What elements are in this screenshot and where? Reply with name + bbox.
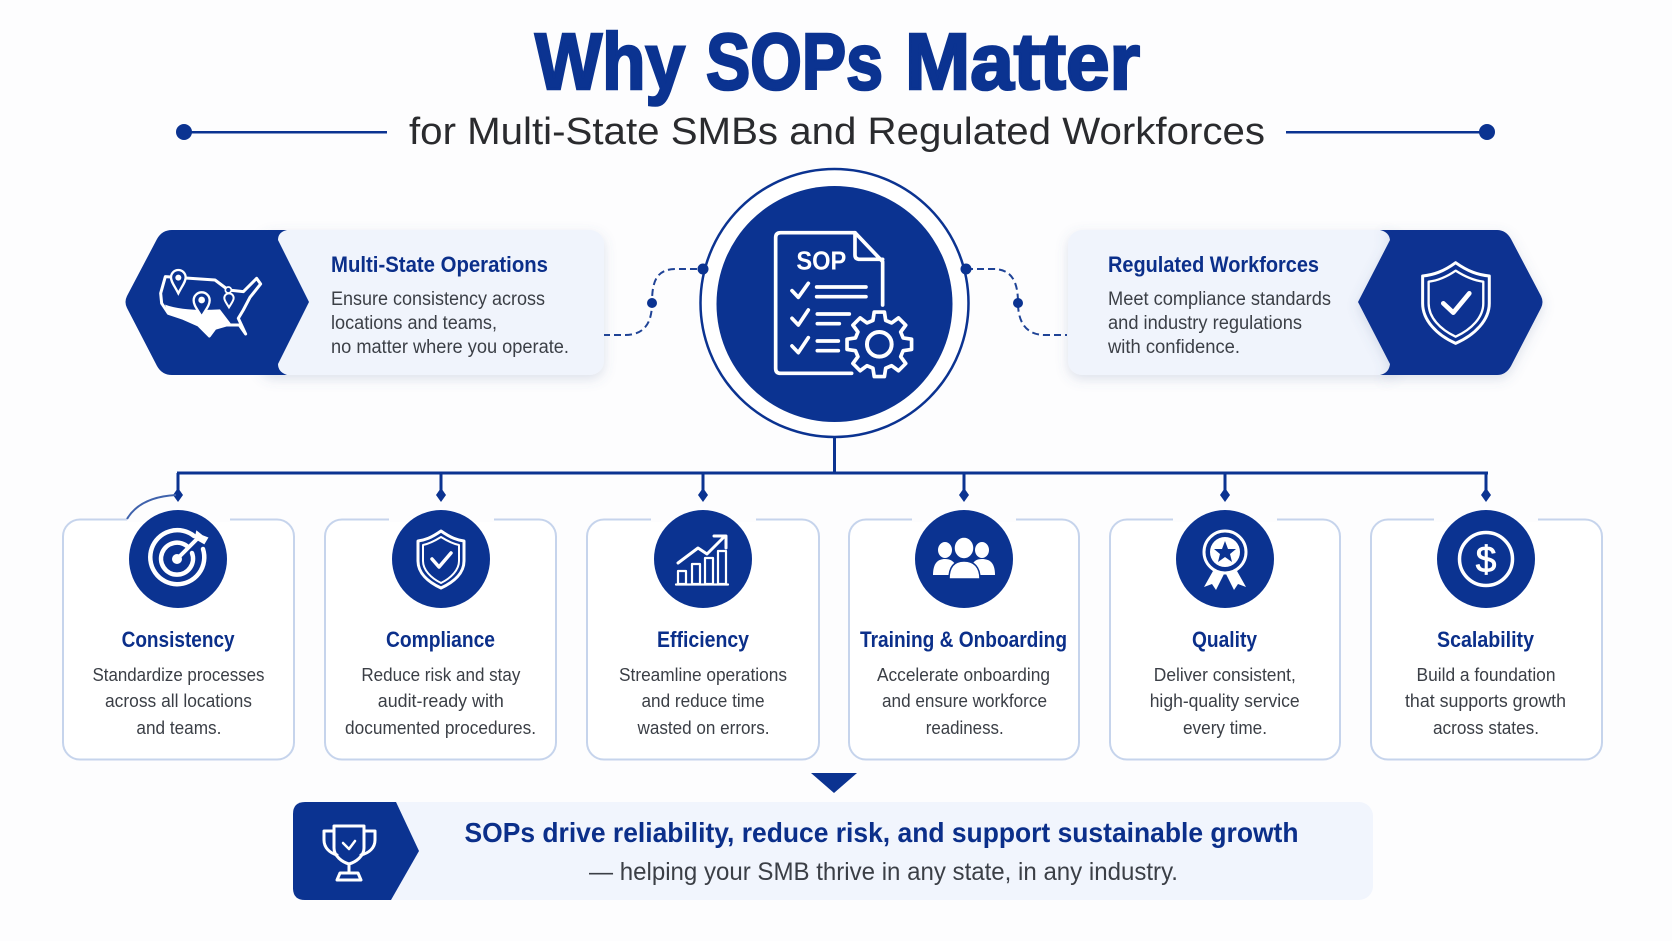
text block: Ensure consistency across — [331, 289, 545, 310]
icon: dollar coin: $ — [1476, 539, 1496, 580]
subtitle right rule — [1286, 124, 1495, 140]
icon: SOP document with gear: SOP — [796, 247, 846, 275]
heading: Efficiency — [657, 627, 750, 652]
text block: and reduce time — [642, 690, 764, 711]
text block: Meet compliance standards — [1108, 289, 1331, 310]
icon: SOP document with gear — [776, 233, 912, 377]
panel: regulated workforces — [1068, 230, 1542, 375]
text block: readiness. — [926, 717, 1004, 738]
text block: and teams. — [136, 717, 221, 738]
text block — [619, 664, 787, 738]
left connector — [603, 269, 703, 335]
text block: wasted on errors. — [637, 717, 770, 738]
text block: locations and teams, — [331, 313, 497, 334]
card: scalability — [1371, 510, 1602, 760]
text block: Streamline operations — [619, 664, 787, 685]
text block: Build a foundation — [1416, 664, 1556, 685]
text block: audit-ready with — [378, 690, 504, 711]
icon: US map with pins — [161, 270, 261, 336]
icon: rising bar chart — [676, 536, 728, 584]
text block: high-quality service — [1150, 690, 1300, 711]
panel: multi-state operations — [126, 230, 604, 375]
card: quality — [1110, 510, 1340, 760]
text block: Accelerate onboarding — [877, 664, 1050, 685]
heading: Regulated Workforces — [1108, 252, 1319, 277]
card: compliance — [325, 510, 556, 760]
right connector — [966, 269, 1067, 335]
card: training and onboarding — [849, 510, 1079, 760]
text block: Standardize processes — [92, 664, 264, 685]
text block: documented procedures. — [345, 717, 536, 738]
text block: every time. — [1183, 717, 1267, 738]
text block — [92, 664, 264, 738]
closing text: — helping your SMB thrive in any state, in any industry. — [589, 858, 1178, 886]
text block — [1107, 289, 1331, 358]
text block: across all locations — [105, 690, 252, 711]
icon: dollar coin — [1460, 532, 1512, 586]
text block: that supports growth — [1405, 690, 1566, 711]
text block: no matter where you operate. — [331, 337, 569, 358]
icon: award ribbon — [1204, 531, 1246, 590]
title: Why — [535, 17, 685, 106]
icon: shield check — [1423, 263, 1489, 343]
icon: trophy — [324, 826, 375, 880]
title — [535, 17, 1140, 106]
text block: and ensure workforce — [882, 690, 1047, 711]
text block: across states. — [1433, 717, 1539, 738]
text block — [1405, 664, 1566, 738]
closing heading: SOPs drive reliability, reduce risk, and support sustainable growth — [464, 817, 1298, 848]
subtitle left rule — [176, 124, 387, 140]
heading: Training & Onboarding — [860, 627, 1067, 652]
heading: Compliance — [386, 627, 495, 652]
text block — [331, 289, 569, 358]
connector tree — [173, 437, 1491, 502]
heading: Consistency — [122, 627, 235, 652]
icon: shield — [418, 531, 464, 588]
panel: conclusion banner — [293, 802, 1373, 900]
heading: Quality — [1192, 627, 1258, 652]
card: efficiency — [587, 510, 819, 760]
text block: and industry regulations — [1108, 313, 1302, 334]
text block: Deliver consistent, — [1154, 664, 1296, 685]
title: SOPs — [706, 17, 883, 106]
heading: Scalability — [1437, 627, 1535, 652]
title: Matter — [905, 17, 1140, 106]
arrow: down to conclusion — [811, 773, 857, 793]
heading: Multi-State Operations — [331, 252, 548, 277]
text block — [345, 664, 536, 738]
icon: target — [150, 530, 207, 584]
subtitle: for Multi-State SMBs and Regulated Workforces — [409, 111, 1265, 153]
icon: team — [933, 537, 995, 579]
text block: with confidence. — [1107, 337, 1240, 358]
text block — [1150, 664, 1300, 738]
text block: Reduce risk and stay — [361, 664, 521, 685]
card: consistency — [63, 495, 294, 760]
text block — [877, 664, 1050, 738]
central SOP emblem — [698, 169, 972, 437]
